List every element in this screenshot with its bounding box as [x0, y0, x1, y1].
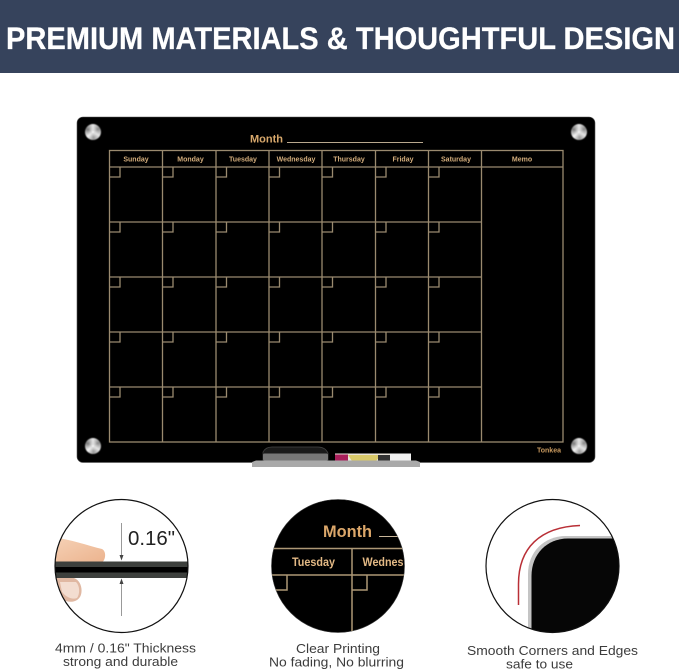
eraser — [263, 447, 328, 460]
caption: Clear Printing — [296, 642, 380, 656]
weekday headers: Monday — [177, 156, 204, 164]
dimension arrows — [120, 523, 124, 616]
edge profile of board — [50, 562, 195, 578]
icon: upper finger — [56, 538, 106, 562]
feature: clear printing — [269, 500, 406, 670]
icon: bolt top right — [571, 124, 587, 140]
print close-up circle: Tuesday — [292, 557, 336, 569]
rounded corner circle — [486, 500, 625, 640]
print close-up circle: Month — [323, 523, 372, 541]
calendar board — [77, 117, 595, 462]
weekday headers: Sunday — [123, 156, 149, 164]
month heading: Month — [250, 134, 283, 146]
feature: smooth corners — [467, 500, 638, 671]
icon: bolt bottom left — [85, 438, 101, 454]
weekday headers — [123, 156, 532, 164]
caption — [467, 644, 638, 671]
weekday headers: Wednesday — [277, 156, 315, 164]
icon: bolt bottom right — [571, 438, 587, 454]
red curve — [518, 526, 580, 605]
weekday headers: Thursday — [333, 156, 365, 164]
caption — [269, 642, 404, 670]
weekday headers: Memo — [512, 156, 532, 164]
marker pen — [335, 454, 411, 461]
weekday headers: Friday — [392, 156, 414, 164]
title banner — [0, 0, 679, 73]
weekday headers: Tuesday — [229, 156, 257, 164]
brand name: Tonkea — [537, 448, 561, 454]
marker tray with eraser and pen — [252, 447, 420, 467]
icon: bolt top left — [85, 124, 101, 140]
icon: lower finger — [56, 578, 82, 602]
caption: strong and durable — [63, 655, 178, 669]
caption: 4mm / 0.16" Thickness — [55, 642, 196, 656]
print close-up circle: Wednes — [362, 557, 404, 569]
weekday headers: Saturday — [441, 156, 471, 164]
print close-up circle — [270, 500, 406, 634]
caption — [55, 642, 196, 669]
tray — [252, 460, 420, 467]
calendar grid — [110, 150, 563, 442]
caption: No fading, No blurring — [269, 656, 404, 670]
feature: thickness — [50, 499, 196, 669]
thickness value: 0.16" — [128, 528, 175, 550]
caption: Smooth Corners and Edges — [467, 644, 638, 658]
thickness circle — [50, 499, 195, 633]
